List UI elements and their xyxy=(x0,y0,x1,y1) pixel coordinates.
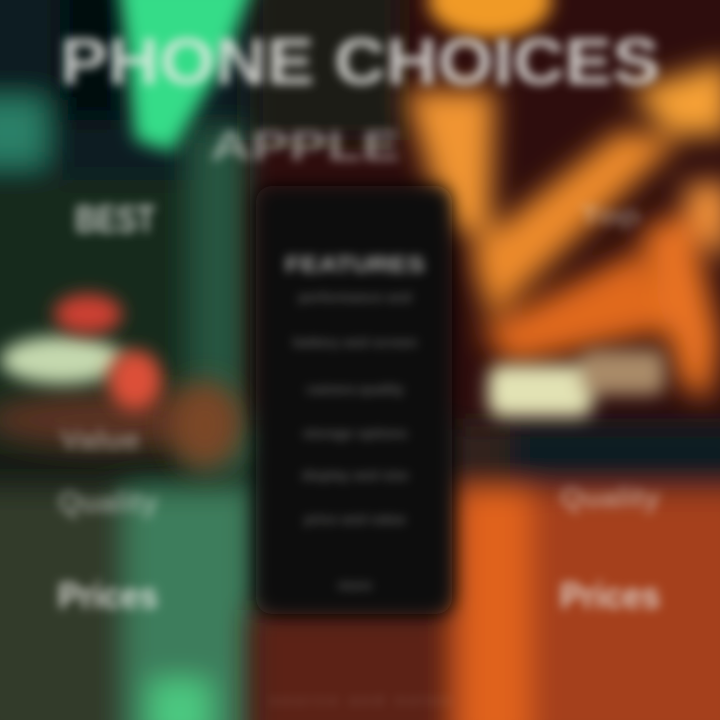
panel list text: performance and xyxy=(298,289,412,305)
illustration: left food and plate xyxy=(0,294,241,469)
footer caption: source and notes xyxy=(270,692,450,708)
right column text: Quality xyxy=(560,482,660,513)
icon: green arrow at top xyxy=(118,0,255,152)
panel list text: camera quality xyxy=(306,381,404,397)
panel list text xyxy=(293,289,417,593)
illustration: right pale block xyxy=(488,350,665,417)
panel heading: FEATURES xyxy=(285,252,425,277)
left column text: Value xyxy=(60,424,140,455)
left column text: Quality xyxy=(58,486,158,519)
panel: central phone xyxy=(256,186,452,614)
panel list text: battery and screen xyxy=(293,334,417,350)
icon: orange sun at top xyxy=(428,0,552,38)
panel list text: storage options xyxy=(302,425,408,441)
background: orange right half xyxy=(250,0,720,720)
panel list text: display and size xyxy=(301,467,409,483)
background: green left half xyxy=(0,0,270,720)
title: PHONE CHOICES xyxy=(60,24,660,98)
right column text xyxy=(560,482,660,616)
right column label: Prices xyxy=(560,575,660,616)
right upper label: Top xyxy=(580,200,640,230)
orange diagonal streaks xyxy=(405,60,720,400)
left column label: Prices xyxy=(58,575,158,616)
panel list text: price and value xyxy=(304,511,406,527)
left column heading: BEST xyxy=(75,199,155,241)
panel list text: more xyxy=(338,577,372,593)
subtitle: APPLE xyxy=(210,122,400,169)
left column text xyxy=(58,424,158,616)
